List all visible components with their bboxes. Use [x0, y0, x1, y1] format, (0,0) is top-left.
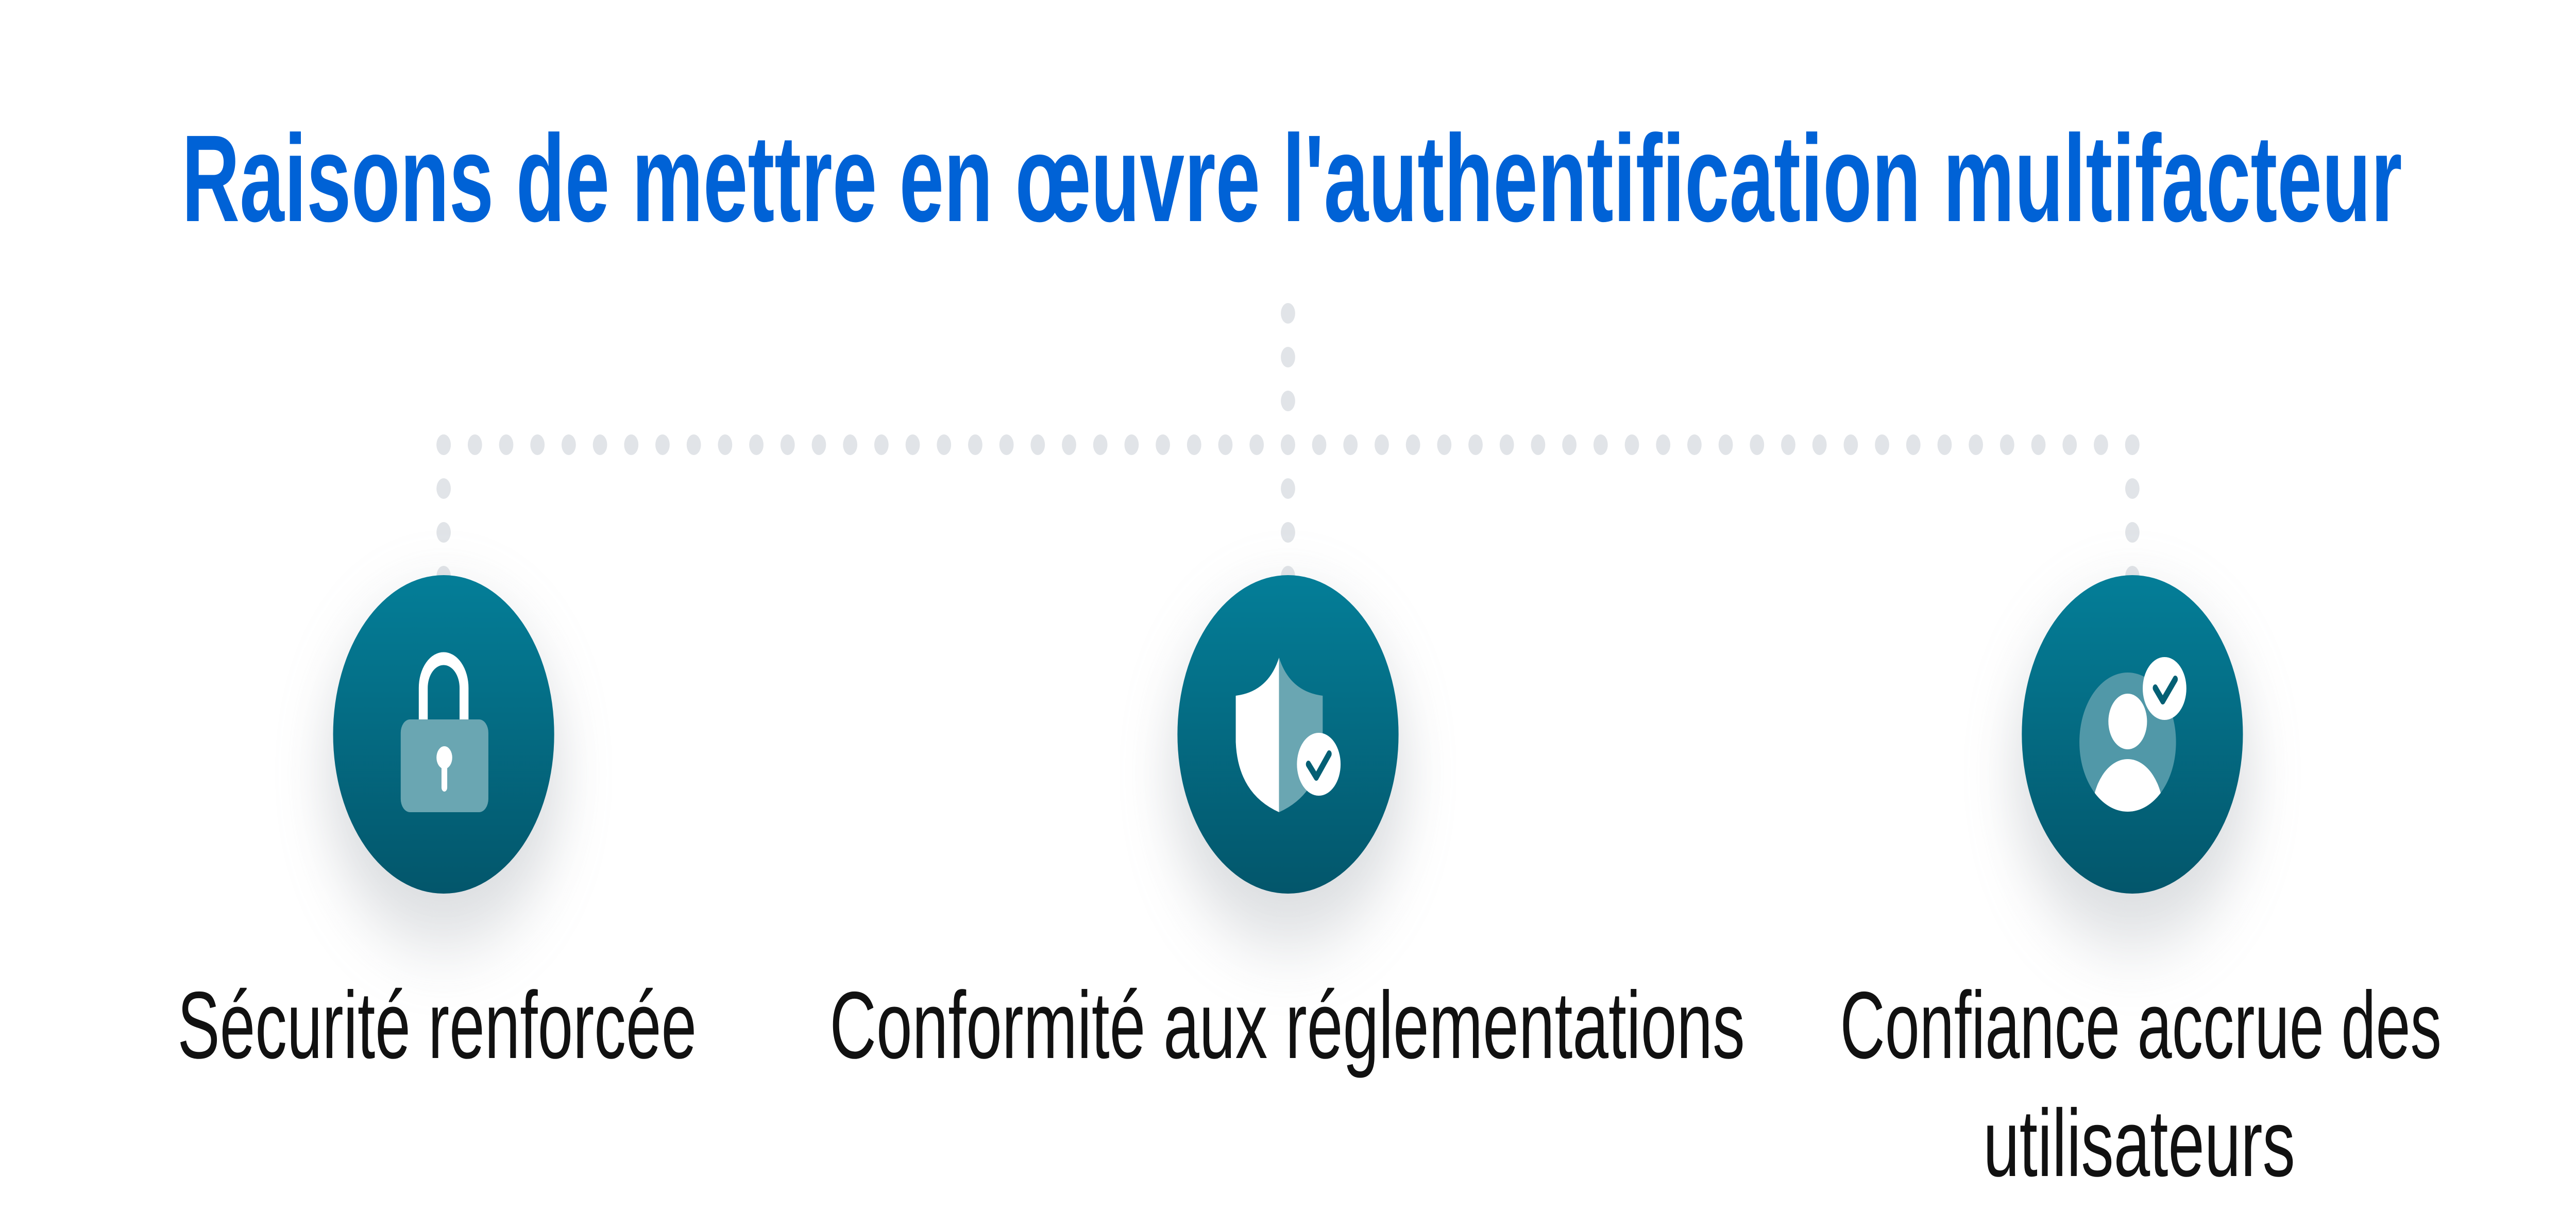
label: confiance accrue des utilisateurs — [1840, 972, 2442, 1196]
title: Raisons de mettre en œuvre l'authentification multifacteur — [182, 109, 2402, 247]
icon circle: lock — [333, 575, 554, 894]
panel: conformité — [829, 575, 1745, 1078]
icon: shield with check — [1236, 658, 1341, 812]
icon circle: shield — [1177, 575, 1399, 894]
label: confiance accrue des utilisateurs: Confiance accrue des — [1840, 972, 2442, 1078]
label: sécurité renforcée: Sécurité renforcée — [177, 972, 697, 1078]
label: confiance accrue des utilisateurs: utilisateurs — [1983, 1090, 2295, 1196]
connector: dotted lines — [444, 313, 2132, 577]
icon: lock — [401, 659, 488, 812]
panel: sécurité renforcée — [177, 575, 697, 1078]
panel: confiance — [1840, 575, 2442, 1196]
icon: user with check — [2079, 657, 2187, 812]
icon circle: user — [2022, 575, 2243, 894]
label: conformité aux réglementations: Conformité aux réglementations — [829, 972, 1745, 1078]
